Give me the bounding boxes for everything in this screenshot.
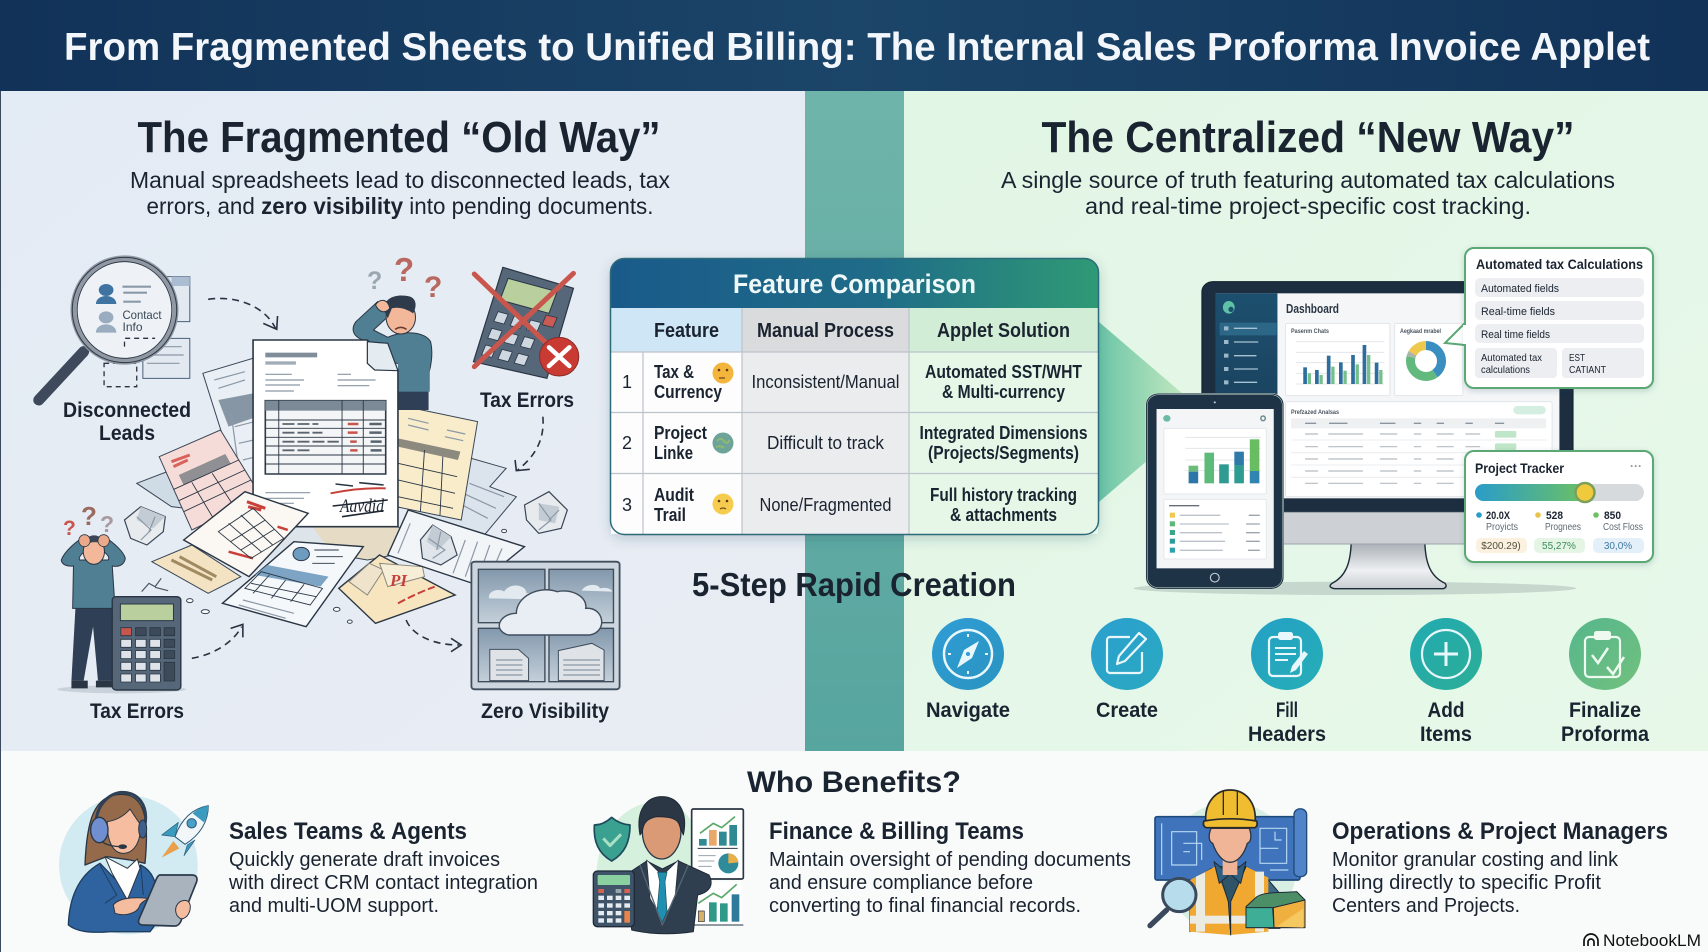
callout: project tracker: 20.0X xyxy=(1486,510,1511,522)
text: sales teams and agents: Quickly generate draft invoices xyxy=(229,848,500,871)
label: tax errors top: Tax Errors xyxy=(480,389,574,412)
step 1: navigate: Navigate xyxy=(926,699,1010,722)
callout: automated tax calculations xyxy=(1445,248,1653,388)
illustration: stressed person with calculator: ? xyxy=(63,517,76,540)
row 2: project link: Integrated Dimensions xyxy=(920,423,1088,443)
text: finance and billing teams: Maintain oversight of pending documents xyxy=(769,848,1131,871)
header bar with title xyxy=(0,0,1708,91)
heading: new way: and real-time project-specific cost tracking. xyxy=(1085,193,1531,219)
label: zero visibility: Zero Visibility xyxy=(481,700,609,723)
row 1: tax and currency: Inconsistent/Manual xyxy=(752,372,900,392)
icon: calculator crossed out xyxy=(473,267,579,378)
illustration: stressed person with calculator: ? xyxy=(81,501,97,531)
icon: zero visibility cloud window xyxy=(471,562,620,689)
callout: project tracker xyxy=(1465,451,1653,562)
illustration text: invoice annotations: Aavdid xyxy=(338,496,384,517)
text: operations and project managers: Operations & Project Managers xyxy=(1332,818,1668,845)
text: finance and billing teams xyxy=(769,818,1131,917)
row 3: audit trail: 3 xyxy=(622,495,632,515)
row 1: tax and currency: & Multi-currency xyxy=(942,382,1065,402)
arrow: transition triangle xyxy=(1099,322,1204,502)
row 1: tax and currency: Automated SST/WHT xyxy=(925,362,1082,382)
heading: old way: errors, and zero visibility into pending documents. xyxy=(146,193,654,219)
table column headers: Manual Process xyxy=(757,320,894,342)
icon: operations manager with hard hat and blueprint xyxy=(1150,790,1307,935)
callout: project tracker: 528 xyxy=(1546,510,1563,522)
step 4: add items xyxy=(1410,618,1482,746)
illustration: stressed person with calculator xyxy=(57,501,186,693)
row 3: audit trail: Full history tracking xyxy=(930,485,1077,505)
heading: 5-step rapid creation: 5-Step Rapid Creation xyxy=(692,566,1016,603)
heading: new way: A single source of truth featuring automated tax calculations xyxy=(1001,167,1615,193)
person worried behind invoice xyxy=(398,390,429,410)
step 4: add items: Items xyxy=(1420,723,1472,746)
callout: project tracker: Proyicts xyxy=(1486,522,1518,533)
text: operations and project managers xyxy=(1332,818,1668,917)
icon: question marks over worried person: ? xyxy=(367,267,382,295)
icon: magnifier over contact cards xyxy=(39,257,190,400)
icon: question marks over worried person xyxy=(367,251,442,304)
step 1: navigate xyxy=(926,618,1010,722)
heading: new way xyxy=(1001,113,1615,219)
illustration: desktop monitor dashboard: Prefzazed Analsas xyxy=(1291,409,1339,416)
row 3: audit trail: Trail xyxy=(654,505,686,525)
row 2: project link: (Projects/Segments) xyxy=(928,443,1079,463)
text: sales teams and agents: with direct CRM contact integration xyxy=(228,871,538,894)
step 3: fill headers: Fill xyxy=(1276,699,1298,722)
heading: new way: The Centralized “New Way” xyxy=(1042,113,1574,162)
row 1: tax and currency: Tax & xyxy=(654,362,694,382)
illustration: tablet with chart xyxy=(1147,394,1283,588)
icon: question marks over worried person: ? xyxy=(424,271,442,304)
step 4: add items: Add xyxy=(1428,699,1464,722)
step 5: finalize proforma xyxy=(1561,618,1649,746)
table title bar: Feature Comparison xyxy=(733,269,976,299)
icon: magnifier over contact cards: Contact xyxy=(122,308,162,322)
row 3: audit trail: None/Fragmented xyxy=(760,495,892,515)
callout: project tracker: 850 xyxy=(1604,510,1621,522)
text: finance and billing teams: Finance & Billing Teams xyxy=(769,818,1024,845)
text: sales teams and agents: and multi-UOM support. xyxy=(229,894,439,917)
logo: NotebookLM: NotebookLM xyxy=(1603,931,1701,950)
label: disconnected leads xyxy=(63,399,191,445)
illustration: desktop monitor dashboard: Pasenm Chats xyxy=(1291,328,1329,335)
step 5: finalize proforma: Proforma xyxy=(1561,723,1649,746)
text: operations and project managers: billing directly to specific Profit xyxy=(1332,871,1601,894)
panel: feature comparison table xyxy=(610,258,1099,535)
text: sales teams and agents: Sales Teams & Agents xyxy=(229,818,467,845)
row 2: project link: Difficult to track xyxy=(767,433,885,453)
row 2: project link xyxy=(622,423,1088,463)
callout: project tracker: ··· xyxy=(1630,459,1642,473)
table title bar xyxy=(610,258,1099,308)
callout: project tracker: Project Tracker xyxy=(1475,460,1564,476)
illustration: desktop monitor dashboard: Aegkaad mrabel xyxy=(1400,328,1441,335)
label: disconnected leads: Leads xyxy=(99,422,155,445)
step 3: fill headers xyxy=(1248,618,1326,746)
icon: sales agent with headset and rocket xyxy=(59,792,208,934)
callout: project tracker: 30,0% xyxy=(1604,541,1632,552)
text: operations and project managers: Monitor granular costing and link xyxy=(1332,848,1619,871)
illustration: desktop monitor dashboard: Dashboard xyxy=(1286,301,1339,316)
callout: automated tax calculations: calculations xyxy=(1481,364,1530,376)
callout: project tracker: Cost Floss xyxy=(1603,522,1643,533)
illustration: fragmented paper pile xyxy=(124,295,567,627)
icon: magnifier over contact cards: Info xyxy=(122,320,143,334)
callout: automated tax calculations: EST xyxy=(1569,352,1585,364)
label: tax errors bottom: Tax Errors xyxy=(90,700,184,723)
callout: project tracker: 55,27% xyxy=(1542,541,1576,552)
header bar with title: From Fragmented Sheets to Unified Billing: The Internal Sales Proforma Invoice Applet xyxy=(64,26,1650,69)
icon: question marks over worried person: ? xyxy=(394,251,414,288)
callout: automated tax calculations: Automated fields xyxy=(1481,283,1559,295)
illustration text: invoice annotations: PI xyxy=(389,571,408,590)
table column headers: Applet Solution xyxy=(937,320,1070,342)
table column headers: Feature xyxy=(654,320,719,342)
callout: project tracker: Prognees xyxy=(1545,522,1581,533)
row 3: audit trail: & attachments xyxy=(950,505,1057,525)
callout: automated tax calculations: Real-time fields xyxy=(1481,306,1555,318)
callout: automated tax calculations: Automated tax xyxy=(1481,352,1543,364)
heading: who benefits: Who Benefits? xyxy=(747,766,961,799)
row 3: audit trail xyxy=(622,485,1077,525)
illustration: stressed person with calculator: ? xyxy=(100,511,114,537)
text: finance and billing teams: and ensure compliance before xyxy=(769,871,1033,894)
step 5: finalize proforma: Finalize xyxy=(1569,699,1641,722)
row 2: project link: Linke xyxy=(654,443,693,463)
callout: automated tax calculations: CATIANT xyxy=(1569,364,1606,376)
row 1: tax and currency: Currency xyxy=(654,382,722,402)
step 2: create: Create xyxy=(1096,699,1158,722)
text: sales teams and agents xyxy=(228,818,538,917)
callout: project tracker: $200.29) xyxy=(1481,541,1521,552)
text: operations and project managers: Centers and Projects. xyxy=(1332,894,1520,917)
table column fills xyxy=(611,308,1098,534)
arrows: dashed flow arrows xyxy=(192,298,543,658)
table column headers xyxy=(654,320,1070,342)
heading: old way: Manual spreadsheets lead to disconnected leads, tax xyxy=(130,167,670,193)
text: finance and billing teams: converting to final financial records. xyxy=(769,894,1081,917)
row 2: project link: 2 xyxy=(622,433,632,453)
icon: finance professional with charts xyxy=(593,797,743,934)
step 2: create xyxy=(1091,618,1163,722)
row 1: tax and currency xyxy=(622,362,1082,402)
callout: automated tax calculations: Automated tax Calculations xyxy=(1476,257,1643,272)
row 1: tax and currency: 1 xyxy=(622,372,632,392)
heading: old way: The Fragmented “Old Way” xyxy=(138,113,660,162)
heading: old way xyxy=(130,113,670,219)
row 2: project link: Project xyxy=(654,423,707,443)
step 3: fill headers: Headers xyxy=(1248,723,1326,746)
row 3: audit trail: Audit xyxy=(654,485,694,505)
illustration: desktop monitor dashboard xyxy=(1134,282,1576,595)
label: disconnected leads: Disconnected xyxy=(63,399,191,422)
illustration text: invoice annotations xyxy=(338,496,408,590)
callout: automated tax calculations: Real time fields xyxy=(1481,329,1550,341)
